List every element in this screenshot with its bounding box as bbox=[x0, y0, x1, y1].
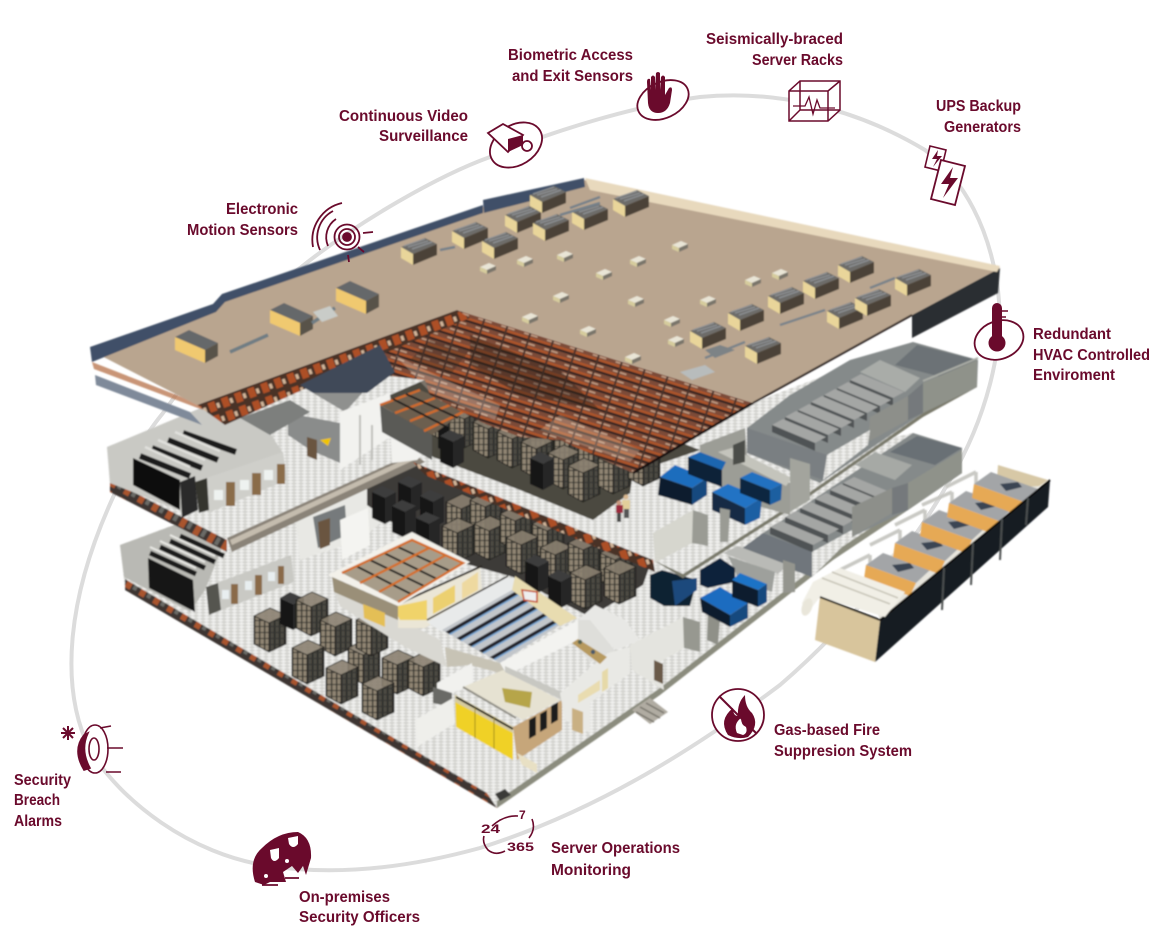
roof front underside strip bbox=[197, 310, 470, 425]
fuel tank bbox=[802, 568, 905, 617]
label: biometric access: Biometric Access bbox=[508, 47, 633, 64]
label: security officers: Security Officers bbox=[299, 909, 420, 926]
rooftop front chiller cluster bbox=[680, 256, 931, 380]
label: HVAC: HVAC Controlled bbox=[1033, 347, 1150, 364]
network operations rooms bbox=[328, 532, 720, 801]
lower rear wall bbox=[740, 533, 812, 577]
icon: 24/7/365 cycle: 365 bbox=[507, 840, 534, 854]
upper floor white wall and orange-grid room bbox=[380, 390, 467, 463]
label: video surveillance: Continuous Video bbox=[339, 108, 468, 125]
room front wall bbox=[332, 577, 398, 620]
icon: surveillance camera bbox=[482, 113, 550, 177]
tan glass panels bbox=[578, 680, 600, 703]
label: security officers: On-premises bbox=[299, 889, 390, 906]
3D cutaway of the data center building bbox=[90, 178, 1050, 808]
label: UPS: UPS Backup bbox=[936, 98, 1021, 115]
backup generator yard bbox=[799, 465, 1050, 662]
cream glazed walls bbox=[398, 566, 482, 628]
office corner partition and door bbox=[630, 617, 684, 690]
label: security officers bbox=[299, 889, 420, 926]
label: breach alarms bbox=[14, 772, 71, 830]
label: HVAC bbox=[1033, 326, 1150, 384]
partition wall below the glass rooms bbox=[334, 590, 447, 667]
label: biometric access: and Exit Sensors bbox=[512, 68, 633, 85]
operations center desks bbox=[442, 590, 560, 663]
icon: alarm horn bbox=[61, 725, 123, 773]
roof light edge bbox=[585, 178, 1000, 272]
label: breach alarms: Security bbox=[14, 772, 71, 789]
label: HVAC: Redundant bbox=[1033, 326, 1111, 343]
lower floor left server room bbox=[148, 462, 432, 615]
icon: 24/7/365 cycle: 24 bbox=[481, 822, 500, 836]
icon: seismic rack box bbox=[789, 81, 840, 121]
upper floor blue cooling units bbox=[658, 452, 782, 525]
label: UPS: Generators bbox=[944, 119, 1021, 136]
icon: 24/7/365 cycle bbox=[481, 808, 534, 854]
operations center back wall bbox=[427, 578, 517, 632]
label: server operations: Server Operations bbox=[551, 840, 680, 857]
roof side underside orange strip bbox=[92, 362, 203, 410]
label: biometric access bbox=[508, 47, 633, 85]
label: motion sensors bbox=[187, 201, 298, 239]
label: UPS bbox=[936, 98, 1021, 136]
roof rear parapet bbox=[90, 205, 483, 362]
lobby walls bbox=[578, 605, 640, 650]
label: breach alarms: Alarms bbox=[14, 813, 62, 830]
visitors on the server floor bbox=[616, 494, 630, 522]
icon: thermometer bbox=[969, 303, 1029, 366]
security desk room floor bbox=[463, 670, 560, 720]
upper floor slab bbox=[107, 342, 978, 578]
upper rear wall bbox=[747, 428, 827, 480]
label: server operations: Monitoring bbox=[551, 862, 631, 879]
label: video surveillance bbox=[339, 108, 468, 145]
label: seismic racks: Server Racks bbox=[752, 52, 843, 69]
rooftop large air handlers bbox=[175, 281, 379, 363]
label: video surveillance: Surveillance bbox=[379, 128, 468, 145]
ceiling over upper left rooms bbox=[300, 345, 395, 393]
lower floor slab bbox=[120, 433, 962, 808]
icon: motion sensor bbox=[312, 203, 373, 262]
generator sets bbox=[864, 472, 1038, 596]
icon: 24/7/365 cycle: 7 bbox=[519, 808, 526, 822]
lower floor front cage field bbox=[254, 592, 440, 720]
yellow security console bbox=[455, 695, 513, 760]
concrete end block bbox=[815, 597, 880, 662]
icon: UPS battery cards bbox=[925, 146, 965, 205]
upper floor mechanical rooms bbox=[700, 342, 978, 515]
entrance steps bbox=[632, 698, 668, 724]
console side wall bbox=[513, 700, 562, 760]
small office walls bbox=[437, 663, 473, 693]
lobby door bbox=[572, 708, 583, 734]
label: fire suppression: Gas-based Fire bbox=[774, 722, 880, 739]
label: seismic racks bbox=[706, 31, 843, 69]
exposed ceiling structure under the roof bbox=[375, 310, 753, 473]
grey wall behind blue units bbox=[700, 428, 790, 515]
generator deck bbox=[865, 486, 1040, 620]
label: fire suppression bbox=[774, 722, 912, 760]
floor drain mat bbox=[495, 789, 511, 801]
upper floor corner partition bbox=[653, 508, 730, 563]
label: motion sensors: Electronic bbox=[226, 201, 298, 218]
shaded corridor floor bbox=[445, 647, 507, 675]
icon: security officers bbox=[253, 832, 311, 885]
label: motion sensors: Motion Sensors bbox=[187, 222, 298, 239]
label: breach alarms: Breach bbox=[14, 792, 60, 809]
rooftop rear chiller cluster bbox=[401, 186, 649, 265]
label: seismic racks: Seismically-braced bbox=[706, 31, 843, 48]
operations room front wall bbox=[500, 620, 578, 675]
roof side underside blue strip bbox=[95, 375, 202, 425]
monitoring ring connecting the security features bbox=[71, 95, 999, 870]
waiting bench bbox=[572, 639, 607, 664]
cream side floor and wall sign bbox=[512, 576, 577, 626]
roof end wall bbox=[912, 268, 1000, 338]
upper floor left rooms bbox=[107, 388, 390, 518]
yard rear panel bbox=[997, 465, 1048, 495]
icon: hand bbox=[631, 72, 695, 128]
lower floor mechanical rooms bbox=[723, 433, 962, 593]
label: HVAC: Enviroment bbox=[1033, 367, 1115, 384]
ceiling frame bbox=[328, 532, 470, 606]
rooftop vents bbox=[480, 241, 788, 364]
exposed orange ceiling grid bbox=[342, 540, 463, 602]
icon: fire suppression bbox=[712, 689, 764, 741]
label: server operations bbox=[551, 840, 680, 879]
upper floor server cages bbox=[390, 360, 700, 520]
roof deck bbox=[90, 178, 1000, 405]
lower floor server cages behind the operations rooms bbox=[367, 463, 650, 617]
label: fire suppression: Suppresion System bbox=[774, 743, 912, 760]
radiator wall bbox=[875, 480, 1050, 662]
glass service room bbox=[723, 546, 788, 574]
lower floor blue cooling units bbox=[650, 558, 767, 627]
